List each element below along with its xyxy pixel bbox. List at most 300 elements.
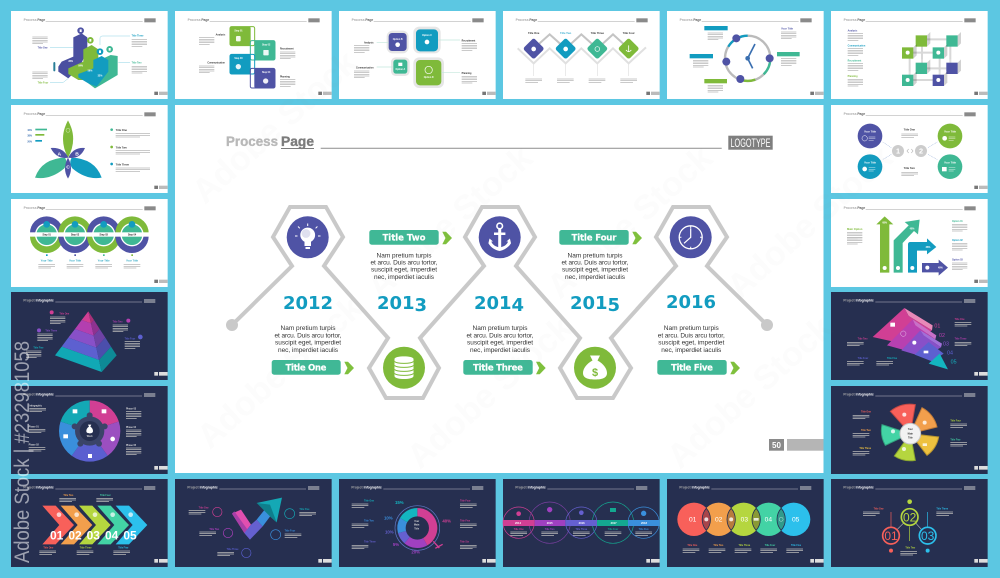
cube labels: Recruitment	[848, 59, 861, 62]
text block: title four copy: suscipit eget, imperdiet	[562, 267, 628, 274]
text block: title three copy: Nam pretium turpis	[472, 325, 528, 332]
panel: puzzle wheel	[11, 386, 168, 474]
puzzle labels: Phase 02	[29, 445, 39, 447]
panel: fan wheel: Project	[843, 392, 856, 396]
chevron sequence: 04	[105, 529, 119, 543]
petal stats: 20%	[27, 141, 33, 143]
year labels: Title Four	[608, 528, 618, 531]
chevron sequence: 02	[68, 529, 82, 543]
panel: clock cycle	[667, 11, 824, 99]
pyramid labels: Title One	[59, 313, 70, 316]
step labels: Planning	[280, 77, 290, 79]
petal chart: B	[75, 152, 79, 158]
panel: year band circles	[503, 479, 660, 567]
layered numbers and labels: Title Five	[887, 357, 898, 360]
panel: 3D cubes network: Page	[857, 18, 865, 22]
petal chart	[35, 120, 102, 179]
panel: donut chart with percentages: Infographic	[364, 485, 382, 489]
puzzle donut chart: Work	[87, 436, 93, 438]
panel: two sides circles: Process	[844, 112, 857, 116]
year 2014: 4	[512, 295, 524, 316]
panel: pyramid: Project	[23, 298, 36, 302]
panel: check mark: Infographic	[200, 485, 218, 489]
year 2013: 3	[415, 295, 427, 316]
panel: zigzag diamonds	[503, 11, 660, 99]
comparison labels: Title One	[904, 128, 916, 132]
text block: title one copy: et arcu. Duis arcu tortor,	[274, 332, 342, 339]
badge: title four	[559, 230, 629, 245]
panel: check mark: Project	[187, 485, 200, 489]
pyramid labels: Title Five	[33, 347, 44, 350]
comparison labels: Title Two	[904, 166, 915, 170]
badge: title one	[272, 360, 341, 375]
badge: title four: Title Four	[572, 234, 617, 244]
text block: title four copy: et arcu. Duis arcu tortor,	[562, 260, 629, 267]
puzzle labels: Phase 04	[126, 426, 137, 429]
fan sector chart: Your	[908, 429, 913, 431]
pyramid chart	[55, 311, 117, 372]
layered numbers and labels: Title Three	[955, 337, 967, 340]
panel: fan wheel: Infographic	[856, 392, 874, 396]
ring labels: Your Title	[126, 258, 139, 262]
text block: title four copy	[562, 252, 629, 281]
pyramid labels: Title Four	[125, 337, 135, 340]
panel: pyramid: Infographic	[36, 298, 54, 302]
panel: 3D cubes network	[831, 11, 988, 99]
year 2016: 2016	[666, 292, 716, 313]
panel: donut chart with percentages: Project	[351, 485, 364, 489]
donut chart	[384, 500, 451, 554]
arrow: title one	[344, 362, 354, 374]
panel: clock cycle: Page	[693, 18, 701, 22]
donut chart: 40%	[442, 519, 451, 524]
staircase labels: Title One	[38, 46, 48, 49]
clock labels: Your Title	[781, 26, 794, 30]
badge: title two: Title Two	[382, 234, 426, 244]
panel: two sides circles: Page	[857, 112, 865, 116]
option tiles: Option D	[424, 76, 434, 79]
text block: title five copy: et arcu. Duis arcu tortor,	[658, 332, 725, 339]
numbered ring diagram: 01	[884, 529, 898, 543]
year 2015: 201	[570, 293, 608, 314]
text block: title one copy: Nam pretium turpis	[280, 325, 336, 332]
panel: four rounded options: Page	[365, 18, 373, 22]
petal chart: C	[66, 165, 70, 171]
ring labels: Your Title	[41, 258, 53, 262]
option tiles: Option B	[393, 38, 403, 41]
panel: isometric staircase: Process	[24, 18, 37, 22]
venn chain: 01	[689, 517, 697, 524]
clock ring diagram	[722, 34, 774, 83]
panel: puzzle wheel: Infographic	[36, 392, 54, 396]
stair chart	[53, 27, 118, 88]
chevron sequence: 01	[50, 529, 64, 543]
pyramid labels: Title Three	[45, 330, 58, 333]
panel: donut chart with percentages	[339, 479, 496, 567]
step blocks: Step 03	[234, 57, 243, 60]
year timeline band: 2015	[547, 521, 553, 525]
text block: title two copy: Nam pretium turpis	[376, 252, 432, 259]
text block: title five copy: nec, imperdiet iaculis	[661, 347, 722, 354]
3D check arrow	[232, 498, 282, 540]
layered numbers and labels: 05	[951, 360, 957, 366]
zigzag labels	[525, 31, 637, 82]
fan sector chart: Main	[908, 433, 914, 435]
panel: arrow options: Page	[857, 206, 865, 210]
badge: title five: Title Five	[671, 364, 713, 374]
main heading: Process	[226, 134, 278, 149]
venn chain: 02	[715, 517, 723, 524]
ring labels	[38, 254, 140, 268]
step blocks: Step 01	[234, 29, 243, 32]
donut chart: 10%	[385, 530, 394, 535]
arrow labels: Option 01	[952, 220, 963, 223]
donut labels	[352, 499, 477, 549]
comparison circles: 1	[896, 147, 900, 156]
chevron sequence	[42, 506, 147, 544]
venn labels	[683, 544, 803, 552]
panel: linked rings: Page	[37, 206, 45, 210]
comparison circles: Your Title	[944, 130, 957, 134]
icon: light bulb	[287, 216, 329, 258]
cube labels: Analysis	[848, 29, 858, 32]
chevron labels: Title Three	[80, 547, 92, 550]
watermark: diagonal Adobe Stock	[185, 44, 900, 476]
panel: chevron arrows: Infographic	[36, 485, 54, 489]
badge: title three: Title Three	[473, 364, 523, 374]
text block: title three copy: nec, imperdiet iaculis	[470, 347, 531, 354]
bent arrows chart: 36%	[926, 247, 931, 249]
staircase labels: Title Two	[132, 62, 142, 65]
bent arrows chart: 48%	[910, 227, 915, 230]
panel: layered descending steps: Project	[843, 298, 856, 302]
panel: three petals: Process	[24, 112, 37, 116]
check labels and icons: Title Four	[285, 530, 295, 533]
ring labels: Title Two	[905, 546, 916, 549]
panel: three numbered rings: Project	[843, 485, 856, 489]
panel: four rounded options: Process	[352, 18, 365, 22]
panel: zigzag diamonds: Page	[529, 18, 537, 22]
cube labels	[848, 29, 866, 86]
icon: clock	[670, 216, 712, 258]
arrow labels	[847, 220, 967, 270]
year labels: Title Three	[575, 528, 588, 531]
text block: title five copy: suscipit eget, imperdiet	[658, 340, 724, 346]
layered numbers and labels	[847, 318, 971, 366]
icon: anchor	[479, 216, 521, 258]
fan sector chart	[881, 404, 939, 461]
staircase labels: Title Four	[38, 81, 48, 84]
cube network	[902, 32, 961, 86]
badge: title five	[657, 360, 727, 375]
pyramid labels: Title Two	[113, 321, 123, 324]
chevron labels: Title Two	[63, 494, 74, 497]
venn labels: Title Two	[713, 544, 724, 547]
year timeline band: 2016	[579, 521, 585, 525]
petal chart: A	[58, 152, 62, 158]
panel: overlapping circles 01 to 05	[667, 479, 824, 567]
donut chart: Your	[414, 521, 419, 523]
watermark: diagonal Adobe Stock: Adobe Stock	[360, 139, 540, 306]
panel: three numbered rings	[831, 479, 988, 567]
text block: title one copy	[274, 325, 342, 354]
ring labels: Title One	[874, 507, 884, 510]
step blocks: Step 02	[262, 43, 271, 46]
donut labels: Title Two	[364, 519, 374, 522]
donut chart: 5%	[393, 542, 399, 547]
ring labels: Title Three	[936, 507, 949, 510]
watermark: stock number vertical: Adobe Stock | #232981058	[10, 341, 34, 563]
numbered ring diagram	[883, 499, 936, 553]
panel: year band circles: Project	[515, 485, 528, 489]
option labels: Planning	[462, 73, 472, 75]
panel: four steps interlocked: Page	[201, 18, 209, 22]
stair chart: 28%	[68, 61, 74, 63]
ring diagram	[29, 216, 149, 253]
fan labels	[853, 411, 967, 455]
comparison labels	[901, 128, 918, 176]
petal legend: Title Three	[116, 162, 130, 166]
layered numbers and labels: 03	[943, 342, 949, 348]
hexagon timeline line	[226, 207, 773, 398]
petal legend: Title One	[116, 128, 127, 132]
stair chart: 56%	[88, 70, 93, 72]
panel: two sides circles	[831, 105, 988, 193]
bent arrows chart: 68%	[882, 223, 888, 225]
arrow labels: Main Option	[847, 227, 863, 231]
staircase labels	[32, 35, 147, 84]
panel: three petals	[11, 105, 168, 193]
ring diagram: Step 01	[43, 234, 52, 237]
panel: overlapping circles 01 to 05: Infographic	[692, 485, 710, 489]
venn chain: 04	[765, 517, 772, 524]
numbered ring diagram: 03	[921, 529, 935, 543]
panel: three numbered rings: Infographic	[856, 485, 874, 489]
panel: zigzag diamonds: Process	[516, 18, 529, 22]
year 2012: 2012	[283, 293, 333, 314]
year labels: Title Five	[639, 528, 649, 531]
watermark: diagonal Adobe Stock: Adobe Stock	[190, 289, 370, 456]
zigzag labels: Title Three	[591, 31, 605, 35]
numbered ring diagram: 02	[903, 510, 917, 524]
clock labels	[690, 26, 800, 92]
zigzag labels: Title One	[528, 31, 540, 35]
arrow: title two	[442, 232, 452, 244]
panel: four steps interlocked	[175, 11, 332, 99]
panel: four rounded options	[339, 11, 496, 99]
panel: pyramid	[11, 292, 168, 380]
text block: title three copy: et arcu. Duis arcu tortor,	[466, 332, 534, 339]
layered numbers and labels: 02	[939, 333, 945, 339]
chevron labels: Title Five	[118, 547, 129, 550]
puzzle labels: Phase 01	[29, 426, 39, 428]
stair chart: 84%	[78, 65, 84, 68]
chevron labels: Title One	[43, 547, 54, 550]
panel: puzzle wheel: Project	[23, 392, 36, 396]
panel: three petals: Page	[37, 112, 45, 116]
donut labels: Title Four	[460, 499, 471, 502]
petal stats	[27, 129, 47, 143]
venn labels: Title Four	[765, 544, 775, 547]
text block: title five copy	[658, 325, 725, 354]
main heading: Page	[281, 134, 314, 149]
text block: title five copy: Nam pretium turpis	[664, 325, 720, 332]
panel: linked rings: Process	[24, 206, 37, 210]
zigzag labels: Title Two	[560, 31, 572, 35]
badge: title two	[369, 230, 439, 245]
fan labels: Title Five	[950, 438, 961, 441]
ring diagram: Step 02	[71, 234, 80, 237]
petal stats: 38%	[27, 135, 33, 137]
arrow labels: Option 03	[952, 259, 963, 262]
watermark: diagonal Adobe Stock: Adobe Stock	[660, 309, 840, 476]
logotype box: LOGOTYPE	[730, 136, 770, 150]
fan labels: Title Two	[861, 429, 871, 432]
panel: four steps interlocked: Process	[188, 18, 201, 22]
page number: 50	[772, 441, 781, 450]
option tiles	[387, 27, 444, 88]
text block: title two copy: nec, imperdiet iaculis	[374, 274, 435, 281]
panel: linked rings	[11, 199, 168, 287]
step labels	[199, 33, 295, 86]
text block: title one copy: suscipit eget, imperdiet	[275, 340, 341, 346]
panel: overlapping circles 01 to 05: Project	[679, 485, 692, 489]
year labels: Title Two	[545, 528, 555, 531]
bent arrows chart	[876, 216, 948, 276]
text block: title three copy: suscipit eget, imperdiet	[467, 340, 533, 346]
year timeline band: 2018	[641, 521, 647, 525]
layered numbers and labels: Title One	[955, 318, 965, 321]
comparison circles: 2	[919, 147, 923, 156]
chevron sequence: 03	[87, 529, 100, 543]
arrow: title three	[536, 362, 546, 374]
panel: chevron arrows: Project	[23, 485, 36, 489]
panel: chevron arrows	[11, 479, 168, 567]
check labels and icons: Title Two	[209, 528, 220, 531]
option tiles: Option C	[422, 34, 432, 37]
donut chart: 15%	[395, 500, 404, 505]
arrow: title four	[632, 232, 642, 244]
bent arrows chart: 48%	[938, 267, 944, 270]
fan sector chart: Title	[908, 437, 913, 440]
fan labels: Title Three	[859, 447, 872, 450]
fan labels: Title One	[861, 411, 872, 414]
text block: title two copy: suscipit eget, imperdiet	[371, 267, 437, 274]
venn labels: Title One	[687, 544, 698, 547]
watermark: diagonal Adobe Stock: Adobe Stock	[720, 139, 900, 306]
step labels: Communication	[207, 62, 225, 65]
option labels: Recruitment	[462, 39, 475, 42]
panel: layered descending steps: Infographic	[856, 298, 874, 302]
pyramid labels	[26, 310, 143, 358]
option tiles: Option A	[395, 68, 406, 71]
text block: title one copy: nec, imperdiet iaculis	[278, 347, 339, 354]
layered numbers and labels: Title Four	[858, 357, 868, 360]
donut labels: Title Three	[364, 541, 376, 544]
step labels: Analysis	[216, 33, 226, 36]
panel: check mark	[175, 479, 332, 567]
icon: database stack	[383, 347, 425, 389]
zigzag labels: Title Four	[623, 31, 635, 35]
puzzle labels: Phase 03	[126, 409, 137, 411]
text block: title four copy: nec, imperdiet iaculis	[565, 274, 626, 281]
badge: title one: Title One	[286, 364, 327, 374]
text block: title two copy	[370, 252, 438, 281]
comparison circles: Your Title	[864, 160, 877, 164]
year timeline band	[503, 502, 660, 543]
comparison circles	[858, 124, 962, 179]
option labels	[354, 39, 477, 83]
arrow labels: Option 02	[952, 239, 963, 242]
ring labels: Your Title	[69, 258, 82, 262]
ring labels	[863, 507, 953, 555]
panel: isometric staircase: Page	[37, 18, 45, 22]
year 2013: 201	[377, 293, 415, 314]
chevron sequence: 05	[123, 529, 137, 543]
venn chain	[677, 503, 810, 536]
panel: arrow options: Process	[844, 206, 857, 210]
comparison circles: Your Title	[944, 160, 957, 164]
donut chart: 10%	[384, 516, 393, 521]
watermark: diagonal Adobe Stock: Adobe Stock	[540, 139, 720, 306]
chevron labels: Title Four	[100, 494, 111, 497]
panel: main process timeline	[175, 105, 824, 473]
petal legend	[110, 128, 150, 171]
year 2015: 5	[608, 295, 620, 316]
stair chart: 32%	[98, 75, 103, 77]
step blocks: Step 04	[262, 71, 271, 74]
ring diagram: Step 04	[128, 234, 137, 237]
step labels: Recruitment	[280, 47, 294, 50]
ring diagram: Step 03	[100, 234, 108, 237]
page number	[769, 439, 824, 451]
panel: clock cycle: Process	[680, 18, 693, 22]
arrow: title five	[730, 362, 740, 374]
year timeline band: 2014	[515, 521, 521, 525]
layered numbers and labels: 01	[934, 324, 940, 330]
check labels and icons: Title Five	[299, 508, 310, 511]
text block: title four copy: Nam pretium turpis	[568, 252, 623, 259]
venn chain: 05	[792, 517, 800, 524]
donut chart: 20%	[411, 549, 420, 554]
donut labels: Title Six	[460, 541, 470, 544]
year labels: Title One	[514, 528, 524, 531]
petal legend: Title Two	[116, 145, 127, 149]
puzzle donut chart	[59, 400, 120, 462]
puzzle labels: Phase 05	[126, 445, 137, 447]
panel: 3D cubes network: Process	[844, 18, 857, 22]
donut labels: Title One	[364, 499, 375, 502]
check labels and icons: Title Three	[227, 548, 239, 551]
donut labels: Title Five	[460, 519, 471, 522]
badge: title three	[463, 360, 533, 375]
comparison circles: Your Title	[864, 130, 877, 134]
cube labels: Communication	[848, 44, 866, 47]
text block: title three copy	[466, 325, 534, 354]
panel: arrow options	[831, 199, 988, 287]
logotype box	[728, 136, 773, 150]
panel: layered descending steps	[831, 292, 988, 380]
puzzle labels	[29, 405, 141, 455]
donut chart: Main	[414, 525, 420, 527]
ring labels: Your Title	[98, 258, 110, 262]
fan labels: Title Four	[950, 420, 961, 423]
check labels and icons	[189, 507, 316, 558]
venn chain: 03	[741, 517, 748, 524]
watermark: diagonal Adobe Stock: Adobe Stock	[400, 309, 580, 476]
staircase labels: Title Three	[132, 35, 144, 38]
donut chart: Title	[414, 527, 420, 530]
